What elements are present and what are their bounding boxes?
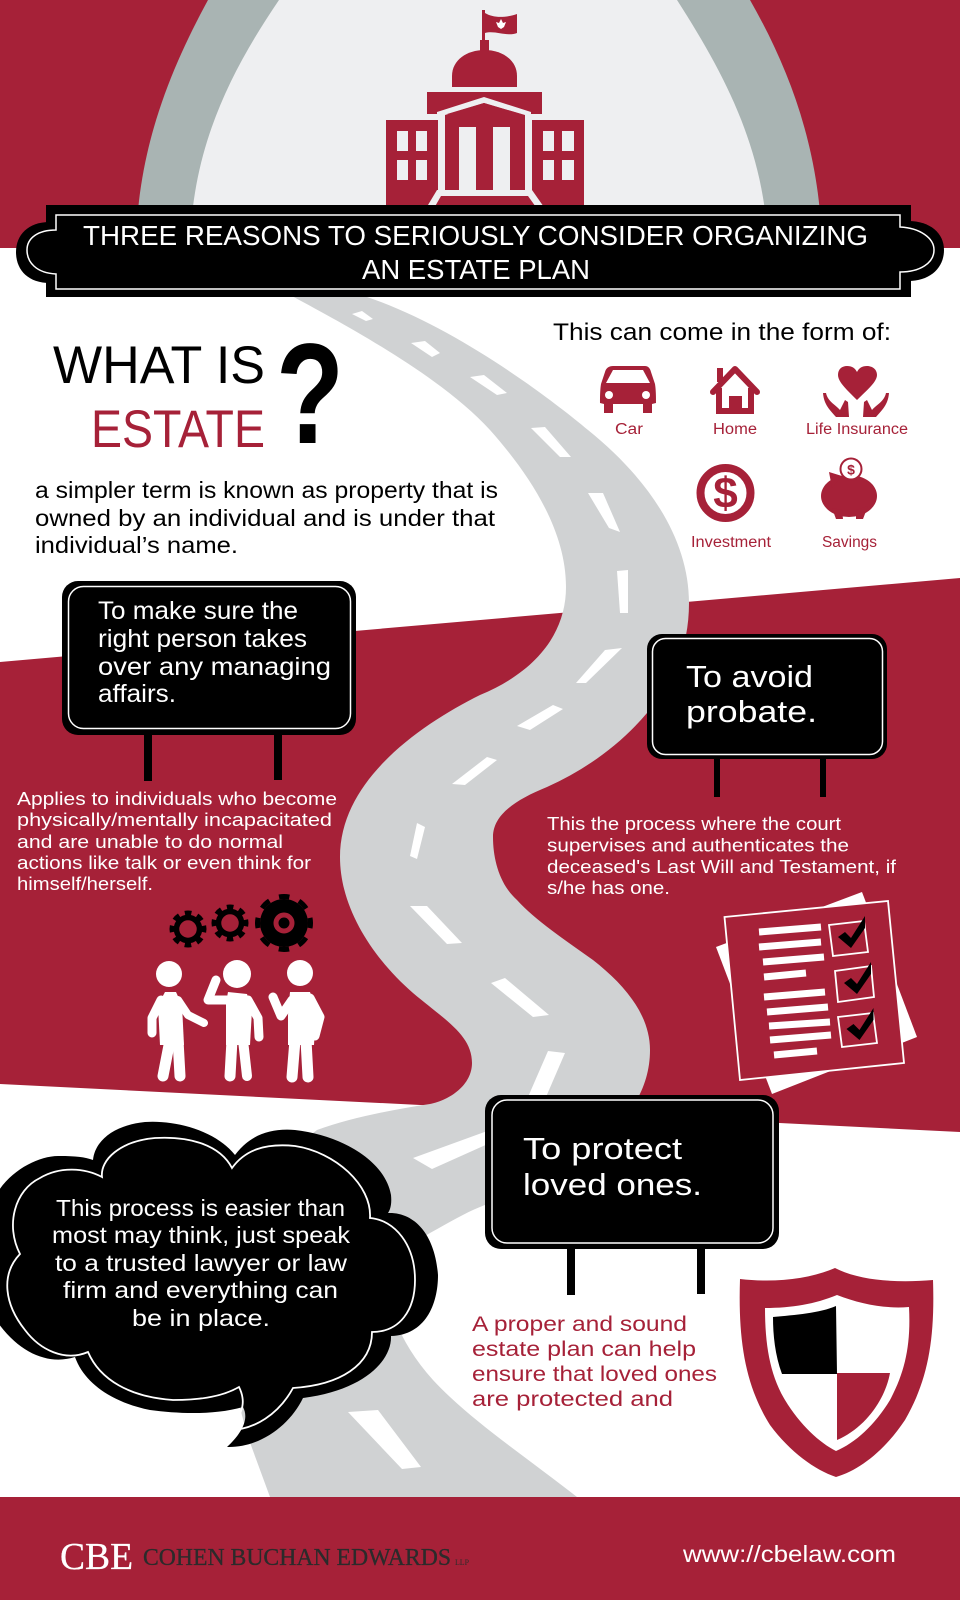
title banner: AN ESTATE PLAN — [362, 254, 590, 285]
label: investment: Investment — [691, 534, 772, 551]
sign: protect loved ones — [485, 1095, 779, 1295]
grey arch with pale interior — [136, 0, 822, 248]
heading: what is estate: ESTATE — [91, 400, 265, 459]
icon: three people — [152, 960, 320, 1077]
label: home: Home — [713, 421, 757, 438]
icon: shield — [740, 1268, 933, 1477]
text: protection explanation: estate plan can help — [472, 1338, 696, 1361]
text: probate explanation: This the process where the court — [547, 813, 841, 834]
footer website url: www://cbelaw.com — [682, 1541, 896, 1567]
sign: protect loved ones: loved ones. — [523, 1167, 702, 1202]
text: estate definition: owned by an individual and is under that — [35, 505, 496, 531]
speech bubble with advice: to a trusted lawyer or law — [55, 1250, 348, 1276]
footer logo: Cohen Buchan Edwards: CBE — [60, 1536, 133, 1578]
text: protection explanation: A proper and sound — [472, 1313, 687, 1336]
heading: what is estate: WHAT IS — [53, 336, 265, 395]
winding road — [230, 295, 689, 1497]
text: incapacitated explanation: Applies to individuals who become — [17, 788, 337, 809]
icon: checklist document — [716, 892, 917, 1094]
icon: dollar coin — [700, 468, 750, 518]
icon: three gears — [169, 892, 315, 954]
title banner: THREE REASONS TO SERIOUSLY CONSIDER ORGANIZING — [83, 220, 868, 251]
sign: managing affairs: over any managing — [98, 653, 331, 681]
sign: protect loved ones: To protect — [523, 1131, 682, 1166]
text: incapacitated explanation: actions like talk or even think for — [17, 852, 311, 873]
text: estate definition: individual’s name. — [35, 532, 238, 558]
text: estate definition — [35, 477, 498, 558]
sign: managing affairs: affairs. — [98, 680, 176, 708]
icon: piggy bank — [821, 458, 877, 519]
text: incapacitated explanation: physically/mentally incapacitated — [17, 809, 332, 830]
footer logo: Cohen Buchan Edwards: LLP — [455, 1558, 470, 1567]
footer bar — [0, 1497, 960, 1600]
speech bubble with advice — [0, 1122, 438, 1447]
sign: avoid probate: To avoid — [686, 659, 813, 694]
text: probate explanation — [547, 813, 897, 898]
text: protection explanation — [472, 1313, 717, 1411]
heading: what is estate — [53, 315, 344, 474]
heading: this can come in the form of: This can come in the form of: — [553, 319, 891, 346]
label: car: Car — [615, 421, 643, 438]
text: estate definition: a simpler term is known as property that is — [35, 477, 498, 503]
text: incapacitated explanation: himself/herself. — [17, 873, 153, 894]
speech bubble with advice: This process is easier than — [56, 1195, 345, 1221]
text: protection explanation: ensure that loved ones — [472, 1363, 717, 1386]
text: incapacitated explanation: and are unable to do normal — [17, 831, 283, 852]
sign: managing affairs: To make sure the — [98, 597, 298, 625]
sign: managing affairs — [62, 581, 356, 781]
speech bubble with advice: be in place. — [132, 1305, 270, 1331]
text: protection explanation: are protected and — [472, 1388, 673, 1411]
label: savings: Savings — [822, 534, 877, 551]
text: probate explanation: s/he has one. — [547, 877, 670, 898]
icon: heart in hands — [823, 366, 889, 417]
speech bubble with advice: firm and everything can — [63, 1277, 338, 1303]
text: probate explanation: deceased's Last Will and Testament, if — [547, 856, 897, 877]
sign: avoid probate: probate. — [686, 694, 817, 729]
speech bubble with advice: most may think, just speak — [52, 1222, 350, 1248]
sign: avoid probate — [647, 634, 887, 797]
top red header background — [0, 0, 960, 248]
label: life insurance: Life Insurance — [806, 421, 908, 438]
red diagonal middle band — [0, 578, 960, 1132]
icon: dollar coin: $ — [713, 469, 738, 518]
footer logo: Cohen Buchan Edwards — [60, 1536, 470, 1578]
footer logo: Cohen Buchan Edwards: COHEN BUCHAN EDWARDS — [143, 1545, 451, 1571]
icon: courthouse building with flag — [386, 10, 584, 210]
sign: managing affairs: right person takes — [98, 625, 307, 653]
title banner — [16, 205, 944, 297]
icon: car — [600, 366, 656, 413]
text: probate explanation: supervises and authenticates the — [547, 834, 849, 856]
icon: piggy bank: $ — [847, 462, 855, 478]
text: incapacitated explanation — [17, 788, 337, 894]
heading: what is estate: ? — [276, 315, 344, 474]
icon: home — [713, 368, 757, 411]
